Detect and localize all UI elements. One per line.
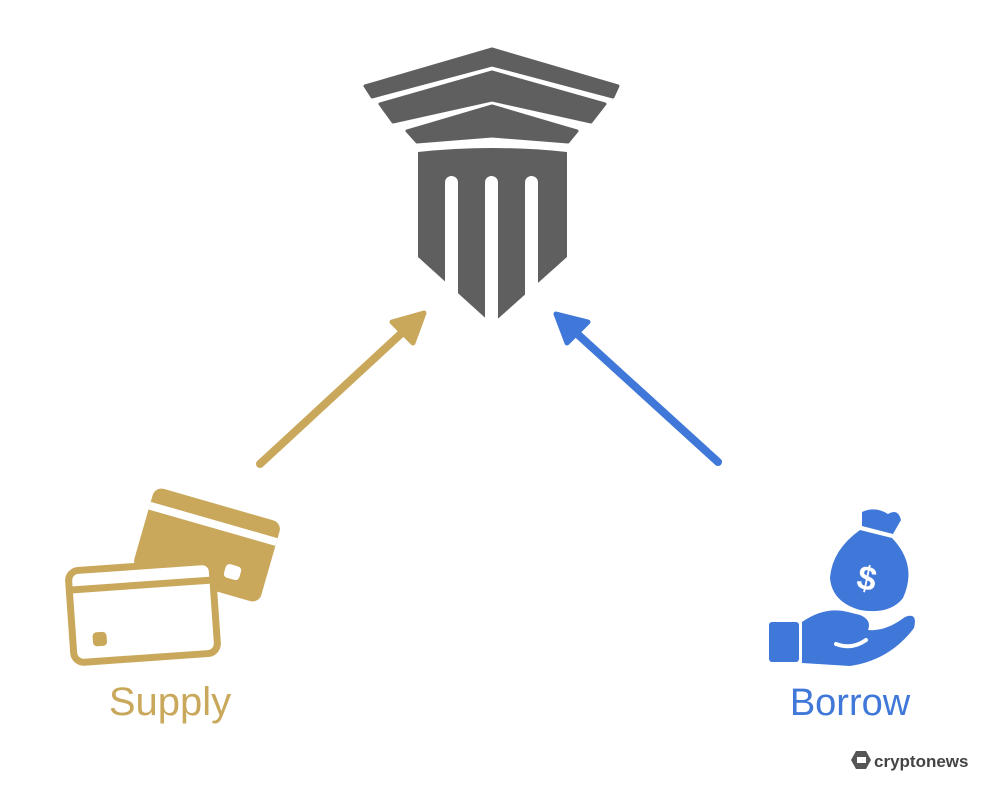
- label: Supply: Supply: [109, 680, 231, 724]
- icon: money bag on hand: $: [854, 558, 880, 600]
- label: Borrow: Borrow: [790, 682, 911, 724]
- icon: money bag on hand: [769, 509, 915, 666]
- logo: cryptonews: cryptonews: [874, 752, 968, 771]
- arrow: borrow to pillar: [556, 314, 718, 462]
- arrow: supply to pillar: [260, 313, 424, 464]
- icon: pillar: [365, 49, 618, 336]
- icon: credit cards: [68, 486, 282, 663]
